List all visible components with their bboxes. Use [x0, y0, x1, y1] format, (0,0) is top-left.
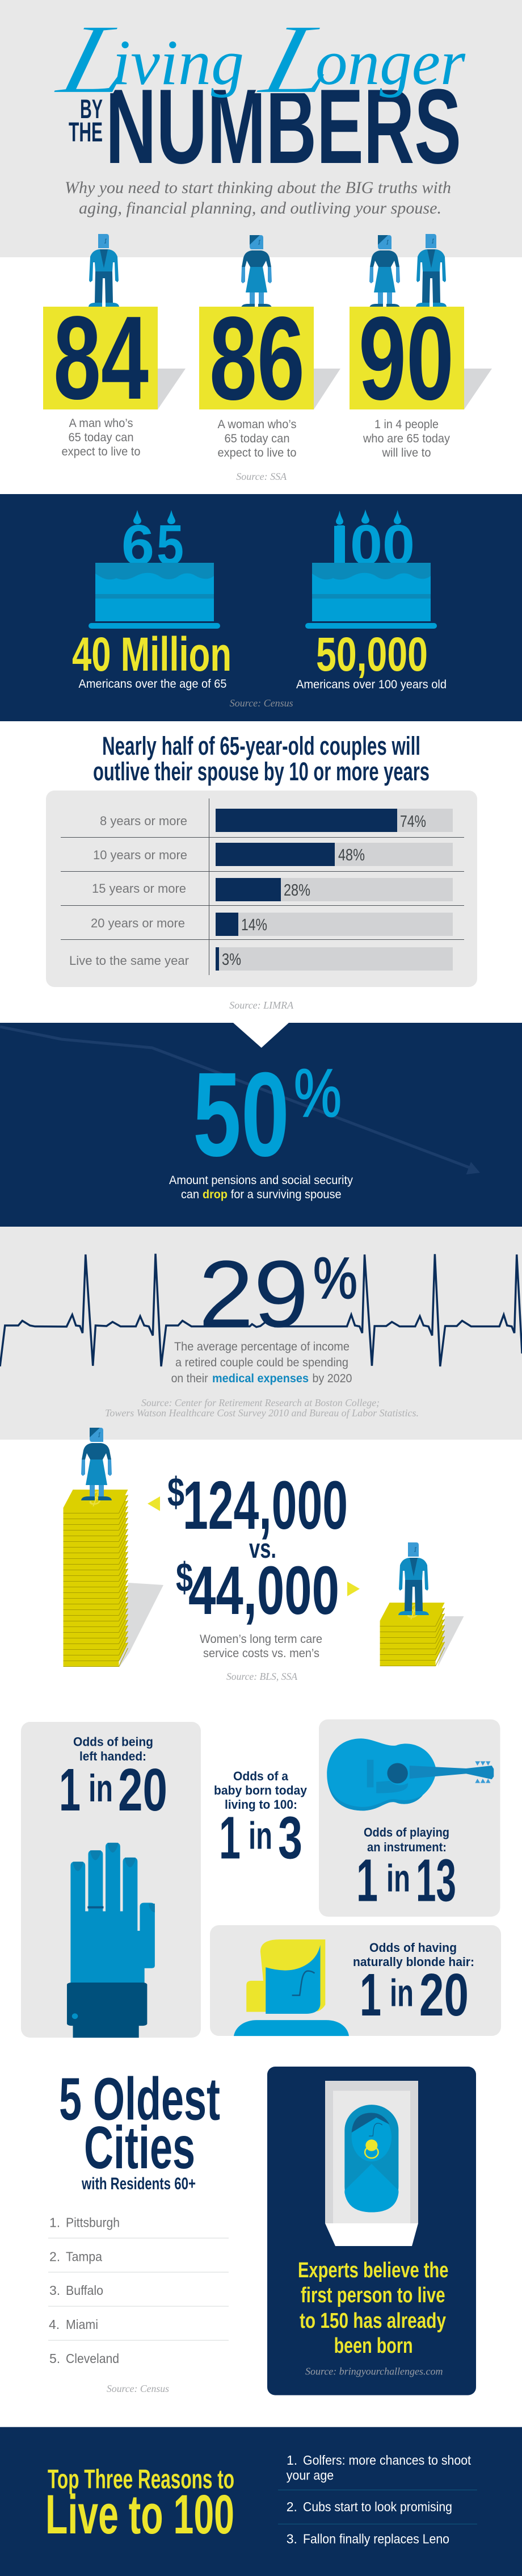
list of cities: 5.	[49, 2351, 60, 2366]
caption	[171, 1340, 352, 1385]
caption 84: A man who’s	[69, 417, 133, 430]
panel: odds of playing instrument	[319, 1720, 500, 1917]
stat box 90: 90	[359, 292, 454, 425]
row labels: 8 years or more	[100, 814, 187, 828]
caption: can	[181, 1188, 199, 1201]
panel: pensions drop	[0, 1023, 522, 1227]
icon: cake 65	[89, 510, 220, 629]
stat: 1 in 13: 1	[356, 1847, 378, 1914]
arrow: falling line	[0, 1027, 480, 1174]
arrow: pointing to woman	[148, 1496, 160, 1511]
stat: 40 million: Americans over the age of 65	[78, 678, 227, 691]
candle numbers 65	[121, 513, 184, 577]
stat: 1 in 20: 1	[59, 1757, 81, 1824]
title: living longer: onger	[315, 27, 466, 98]
panel: top three reasons	[0, 2427, 522, 2576]
reasons list: 1.	[287, 2453, 297, 2468]
candle numbers 65: 6	[121, 513, 154, 577]
list of cities: Buffalo	[66, 2283, 103, 2298]
figure: woman on tall stack	[81, 1428, 112, 1500]
bar values: 48%	[338, 846, 365, 864]
panel: first person to live to 150	[267, 2067, 476, 2395]
title: by the numbers: THE	[69, 118, 103, 148]
candle numbers 100	[334, 525, 412, 563]
title: living longer	[47, 3, 466, 114]
stat: 40 million	[72, 628, 231, 691]
reasons list: 2.	[287, 2499, 297, 2514]
title: living longer: L	[250, 3, 349, 114]
panel: long term care costs	[64, 1428, 464, 1682]
icon: guitar	[327, 1738, 494, 1810]
notch triangle	[233, 1023, 289, 1048]
label: Odds of playing	[364, 1825, 449, 1839]
label: naturally blonde hair:	[353, 1955, 474, 1969]
label: baby born today	[214, 1783, 308, 1797]
caption 84	[61, 417, 141, 458]
bar values	[222, 813, 426, 969]
figure: woman on 86 box	[241, 235, 272, 308]
source: bls: Source: BLS, SSA	[226, 1671, 298, 1682]
list of cities: 2.	[49, 2249, 60, 2264]
candle numbers 100: 0	[382, 513, 415, 577]
heading: 5 Oldest	[59, 2066, 220, 2133]
caption 90: 1 in 4 people	[374, 418, 439, 431]
stat: 1 in 20: 1	[360, 1962, 381, 2029]
caption: Amount pensions and social security	[169, 1174, 353, 1187]
caption: Women’s long term care	[200, 1633, 322, 1646]
arrow: pointing to man	[347, 1582, 360, 1596]
caption: by 2020	[312, 1372, 352, 1385]
stat: $44,000: 44,000	[188, 1552, 339, 1629]
stat box 84: 84	[53, 292, 149, 424]
caption 86: A woman who’s	[218, 418, 296, 431]
panel: oldest cities	[48, 2066, 229, 2394]
stat: 1 in 20	[360, 1962, 469, 2029]
caption	[200, 1633, 322, 1660]
panel: odds of living to 100	[214, 1769, 308, 1872]
icon: blonde head	[234, 1939, 349, 2036]
row labels: Live to the same year	[69, 954, 189, 968]
label	[73, 1735, 153, 1763]
stat: 1 in 20	[59, 1757, 167, 1824]
row labels: 15 years or more	[92, 881, 186, 896]
panel: birthday cakes	[0, 494, 522, 721]
label	[214, 1769, 308, 1812]
icon: short stack of money	[380, 1599, 445, 1666]
caption 86: expect to live to	[218, 446, 296, 459]
list of cities: Tampa	[66, 2249, 102, 2264]
stat: 1 in 3: in	[249, 1814, 272, 1858]
subtitle: aging, financial planning, and outliving your spouse.	[79, 199, 441, 218]
panel: medical expenses	[0, 1227, 522, 1440]
caption 84: 65 today can	[68, 431, 134, 444]
figure: man on 90 box	[416, 234, 447, 307]
caption: service costs vs. men’s	[203, 1647, 319, 1660]
stat: 50%: 50	[193, 1047, 289, 1181]
row labels: 20 years or more	[91, 916, 185, 930]
bar values: 74%	[400, 813, 426, 831]
bar values: 3%	[222, 951, 241, 969]
stat: 1 in 3	[219, 1805, 302, 1872]
panel: odds of left handed	[21, 1722, 201, 2038]
list of cities: Cleveland	[66, 2351, 119, 2366]
source: limra: Source: LIMRA	[229, 1000, 294, 1011]
caption: for a surviving spouse	[231, 1188, 342, 1201]
list of cities: 4.	[49, 2317, 60, 2332]
candle numbers 100: 0	[350, 513, 382, 577]
stat: 1 in 20: 20	[118, 1757, 167, 1824]
label: left handed:	[79, 1749, 146, 1763]
callout text: Experts believe the	[298, 2259, 448, 2282]
list of cities: 3.	[49, 2283, 60, 2298]
list of cities: Miami	[66, 2317, 98, 2332]
stat: 1 in 13: in	[386, 1857, 410, 1900]
caption	[169, 1174, 353, 1201]
caption: on their	[171, 1372, 208, 1385]
stat: 40 million: 40 Million	[72, 628, 231, 681]
row labels	[69, 814, 189, 968]
reasons list: Fallon finally replaces Leno	[303, 2532, 449, 2546]
panel: life expectancy	[43, 234, 492, 482]
heading	[45, 2464, 234, 2545]
icon: tall stack of money	[64, 1486, 128, 1667]
caption 84: expect to live to	[61, 445, 141, 458]
stat: $44,000	[176, 1552, 339, 1629]
reasons list: 3.	[287, 2532, 297, 2546]
caption 90: who are 65 today	[363, 432, 450, 445]
list of cities	[48, 2215, 229, 2366]
stat box 86: 86	[209, 292, 305, 425]
title: living longer: iving	[112, 27, 244, 98]
source: census: Source: Census	[107, 2383, 169, 2394]
reasons list: your age	[287, 2468, 334, 2483]
stat: 29%	[199, 1241, 357, 1347]
title: living longer: L	[47, 3, 146, 114]
icon: cake 100	[305, 509, 437, 629]
stat: 1 in 20: 20	[419, 1962, 469, 2029]
stat: 50,000: 50,000	[316, 628, 428, 681]
shadows of boxes	[158, 369, 492, 409]
heading	[59, 2066, 220, 2193]
stat: 29%: 29	[199, 1241, 309, 1347]
icon: short stack of money: $	[404, 1599, 424, 1622]
bar values: 14%	[241, 916, 267, 934]
stat: 1 in 13	[356, 1847, 456, 1914]
heading	[93, 731, 430, 786]
stat: 50%: %	[294, 1055, 342, 1131]
callout text: been born	[334, 2334, 413, 2358]
candle numbers 100: 1	[325, 513, 353, 577]
callout text: to 150 has already	[300, 2309, 446, 2333]
caption: medical expenses	[212, 1372, 309, 1385]
subtitle: Why you need to start thinking about the BIG truths with	[65, 178, 451, 197]
source: medical: Source: Center for Retirement Research at Boston College;	[141, 1397, 380, 1408]
heading: with Residents 60+	[81, 2174, 196, 2193]
stat: 29%: %	[313, 1245, 357, 1311]
source: medical	[105, 1397, 419, 1419]
caption: a retired couple could be spending	[175, 1356, 348, 1369]
panel: outlive spouse	[46, 731, 477, 1011]
label: Odds of a	[233, 1769, 289, 1783]
bar chart	[46, 791, 477, 987]
stat: 1 in 20: in	[89, 1767, 113, 1810]
stat: 50,000	[296, 628, 447, 691]
label	[364, 1825, 449, 1854]
label	[353, 1941, 474, 1969]
figure: man on 84 box	[89, 234, 119, 307]
caption: The average percentage of income	[174, 1340, 350, 1353]
stat: 1 in 3: 1	[219, 1805, 241, 1872]
figure: man on short stack	[398, 1542, 429, 1615]
stat: 50,000: Americans over 100 years old	[296, 678, 447, 691]
source: ssa: Source: SSA	[236, 471, 287, 482]
reasons list: Cubs start to look promising	[303, 2499, 452, 2514]
reasons list	[278, 2453, 477, 2546]
icon: tall stack of money: $	[86, 1486, 106, 1509]
label: living to 100:	[225, 1797, 297, 1812]
heading: Cities	[84, 2114, 195, 2181]
row labels: 10 years or more	[93, 848, 187, 862]
list of cities: Pittsburgh	[66, 2215, 120, 2230]
source: bringyourchallenges: Source: bringyourchallenges.com	[305, 2366, 443, 2377]
stat: $124,000	[167, 1466, 348, 1544]
label: an instrument:	[367, 1840, 447, 1854]
icon: baby in crib	[325, 2081, 418, 2246]
title: by the numbers: BY	[80, 94, 103, 124]
shadow: short stack	[438, 1616, 464, 1666]
heartbeat line	[0, 1254, 522, 1366]
reasons list: Golfers: more chances to shoot	[303, 2453, 472, 2468]
heading: Live to 100	[45, 2483, 234, 2545]
panel: header	[0, 0, 522, 257]
caption 90	[363, 418, 450, 459]
shadow: tall stack	[119, 1583, 163, 1667]
stat: $124,000: $	[167, 1470, 184, 1515]
stat: 1 in 20: in	[390, 1972, 414, 2015]
caption 86	[218, 418, 296, 459]
caption 86: 65 today can	[225, 432, 289, 445]
panel: odds of blonde hair	[210, 1925, 501, 2036]
caption 90: will live to	[382, 446, 431, 459]
callout text	[298, 2259, 448, 2358]
heading: Top Three Reasons to	[48, 2464, 234, 2494]
text: vs.: vs.	[249, 1533, 276, 1563]
subtitle	[65, 178, 451, 218]
bar values: 28%	[284, 881, 310, 900]
source: medical: Towers Watson Healthcare Cost Survey 2010 and Bureau of Labor Statistics.	[105, 1407, 419, 1419]
callout text: first person to live	[301, 2284, 445, 2307]
icon: hand	[67, 1843, 155, 2038]
stat: $44,000: $	[176, 1555, 193, 1600]
stat: 1 in 3: 3	[278, 1805, 302, 1872]
list of cities: 1.	[49, 2215, 60, 2230]
label: Odds of being	[73, 1735, 153, 1749]
caption: drop	[203, 1188, 228, 1201]
figure: woman on 90 box	[369, 235, 400, 308]
stat: 1 in 13: 13	[416, 1847, 456, 1914]
stat: $124,000: 124,000	[183, 1466, 348, 1544]
source: census: Source: Census	[230, 697, 293, 709]
label: Odds of having	[369, 1941, 457, 1955]
candle numbers 65: 5	[157, 513, 184, 577]
